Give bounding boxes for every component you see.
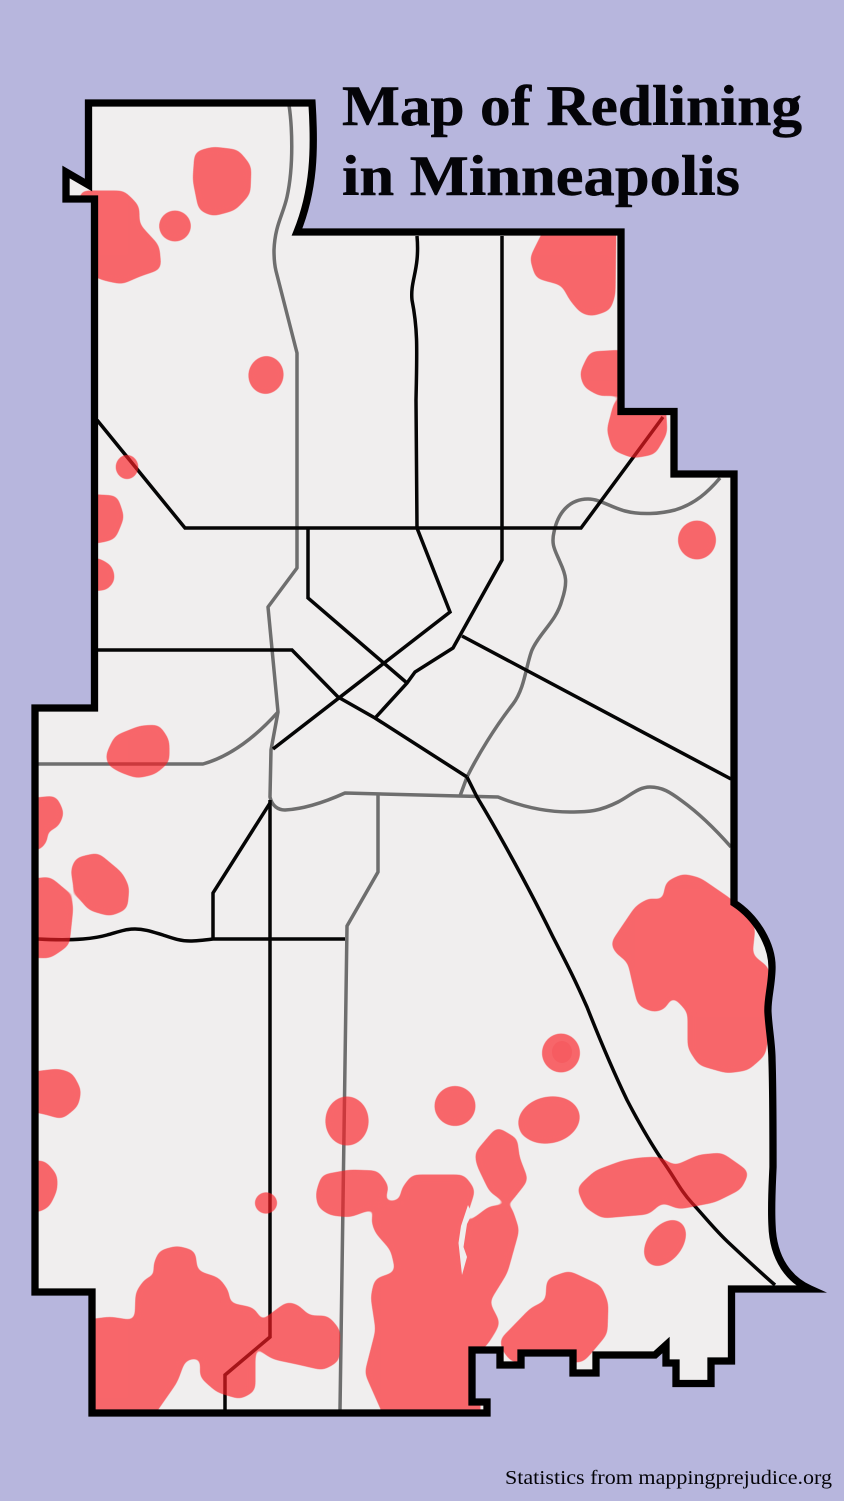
redlined area: west cluster <box>25 725 169 1212</box>
redlined area: south blob <box>500 1271 608 1362</box>
redlined area: southwest blobs <box>96 1246 340 1410</box>
notch between south central lobes <box>458 1205 472 1275</box>
redlined areas <box>25 147 769 1425</box>
neighborhood boundaries: black lines <box>38 236 775 1410</box>
source credit: Statistics from mappingprejudice.org <box>505 1467 832 1489</box>
title: Map of Redlining <box>342 75 802 138</box>
redlined area: northwest cluster <box>80 147 287 591</box>
darker spot in southeast circle <box>552 1041 572 1063</box>
redlined area: south central large blob <box>365 1175 519 1425</box>
redlined area: northeast cluster <box>530 222 716 560</box>
title <box>342 75 802 208</box>
redlined area: south central cluster <box>254 1034 749 1274</box>
redlined area: large southeast blob <box>611 874 769 1073</box>
title: in Minneapolis <box>342 145 740 208</box>
highways: grey lines <box>38 105 731 1410</box>
